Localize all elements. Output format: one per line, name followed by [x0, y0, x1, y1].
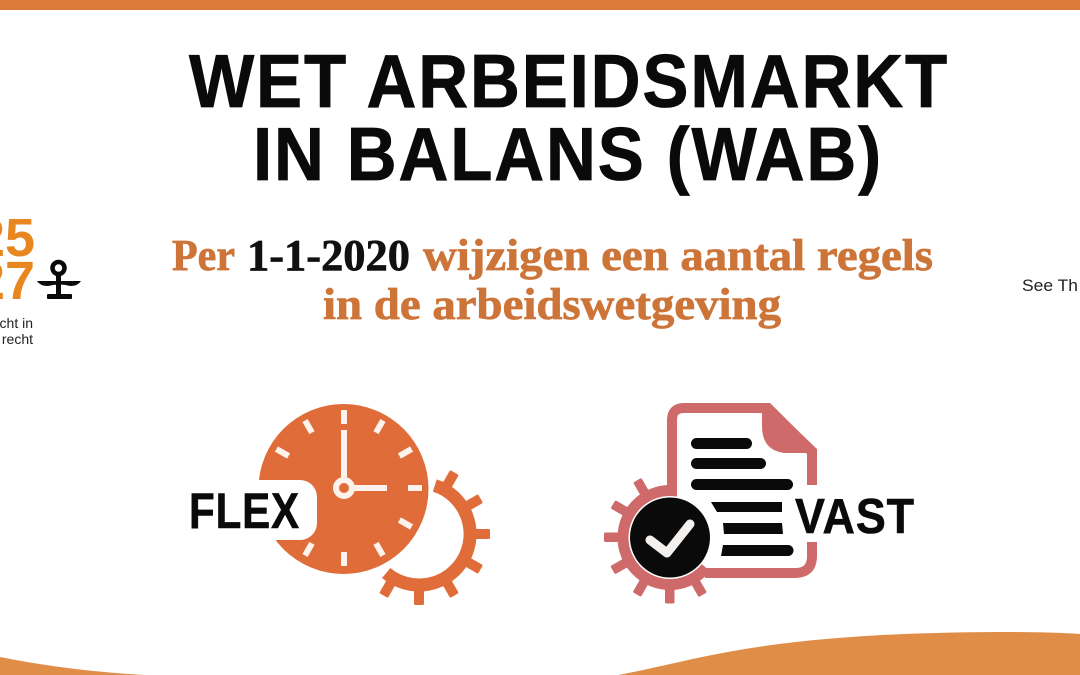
cropped link text at right edge: See Th — [1022, 276, 1078, 295]
subtitle: 1-1-2020 — [247, 231, 410, 280]
logo: partly cropped at left edge — [0, 208, 81, 347]
document outline — [672, 404, 817, 573]
subtitle: Per — [172, 231, 235, 280]
icon: balance scale — [37, 262, 81, 299]
logo numbers — [0, 208, 35, 311]
subtitle: wijzigen een aantal regels — [423, 231, 933, 280]
document gear — [604, 478, 707, 604]
logo caption: recht — [2, 331, 33, 347]
icon: flex clock with gear — [170, 402, 490, 605]
logo caption: cht in — [0, 315, 33, 331]
vast label: VAST — [795, 490, 915, 544]
top orange bar — [0, 0, 1080, 10]
flex label notch — [170, 480, 317, 540]
title: WET ARBEIDSMARKT — [189, 39, 949, 123]
icon: vast document with gear — [604, 404, 915, 604]
subtitle: in de arbeidswetgeving — [323, 280, 781, 329]
title — [189, 39, 949, 196]
document text lines — [691, 438, 794, 556]
bottom orange wave — [0, 632, 1080, 675]
clock face — [256, 402, 430, 576]
logo caption — [0, 315, 33, 347]
check badge — [628, 496, 712, 579]
flex label: FLEX — [189, 483, 300, 539]
clock gear — [379, 470, 490, 605]
subtitle — [172, 231, 933, 329]
title: IN BALANS (WAB) — [253, 112, 883, 196]
